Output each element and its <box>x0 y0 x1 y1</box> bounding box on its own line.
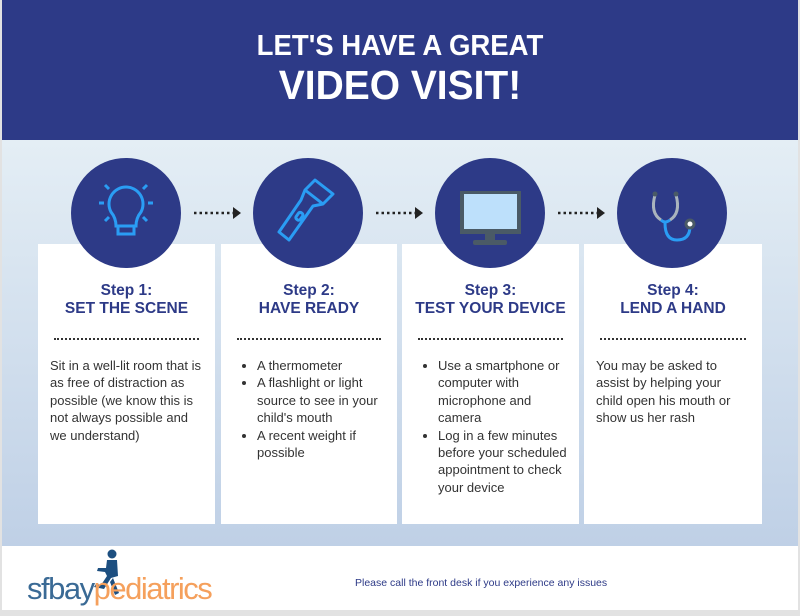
arrow 2 <box>376 207 423 219</box>
title: LET'S HAVE A GREAT <box>257 30 543 62</box>
card: step 1: Sit in a well-lit room that is as free of distraction as possible (we know this is not always possible and we understand) <box>50 358 201 443</box>
footer <box>2 546 798 610</box>
icon: stethoscope <box>617 158 727 268</box>
icon: running kid <box>94 550 119 595</box>
card: step 2: Step 2: <box>283 282 335 299</box>
card: step 1: Step 1: <box>101 282 152 299</box>
card: step 2: HAVE READY <box>259 300 359 317</box>
card: step 4: LEND A HAND <box>620 300 726 317</box>
card: step 4: You may be asked to assist by helping your child open his mouth or show us her rash <box>596 358 730 425</box>
card: step 2: A recent weight if possible <box>257 428 356 460</box>
card: step 1 <box>38 244 215 524</box>
arrow 3 <box>558 207 605 219</box>
icon: lightbulb <box>71 158 181 268</box>
icon: monitor <box>435 158 545 268</box>
card: step 1: SET THE SCENE <box>65 300 188 317</box>
card: step 2 <box>221 244 397 524</box>
card: step 4 <box>584 244 762 524</box>
logo: sfbaypediatrics <box>27 571 211 606</box>
logo <box>27 550 212 606</box>
card: step 4: Step 4: <box>647 282 699 299</box>
header <box>2 0 798 140</box>
card: step 3: TEST YOUR DEVICE <box>415 300 566 317</box>
card: step 3: Log in a few minutes before your scheduled appointment to check your device <box>438 428 567 495</box>
card: step 3: Step 3: <box>465 282 516 299</box>
card: step 2: A thermometer <box>257 358 342 373</box>
card: step 2: A flashlight or light source to see in your child's mouth <box>257 375 378 425</box>
title <box>257 30 544 108</box>
title: VIDEO VISIT! <box>279 62 521 108</box>
footer note: Please call the front desk if you experience any issues <box>355 577 607 589</box>
card: step 3 <box>402 244 579 524</box>
background panel <box>2 140 798 546</box>
icon: flashlight <box>253 158 363 268</box>
card: step 3: Use a smartphone or computer with microphone and camera <box>438 358 559 425</box>
arrow 1 <box>194 207 241 219</box>
